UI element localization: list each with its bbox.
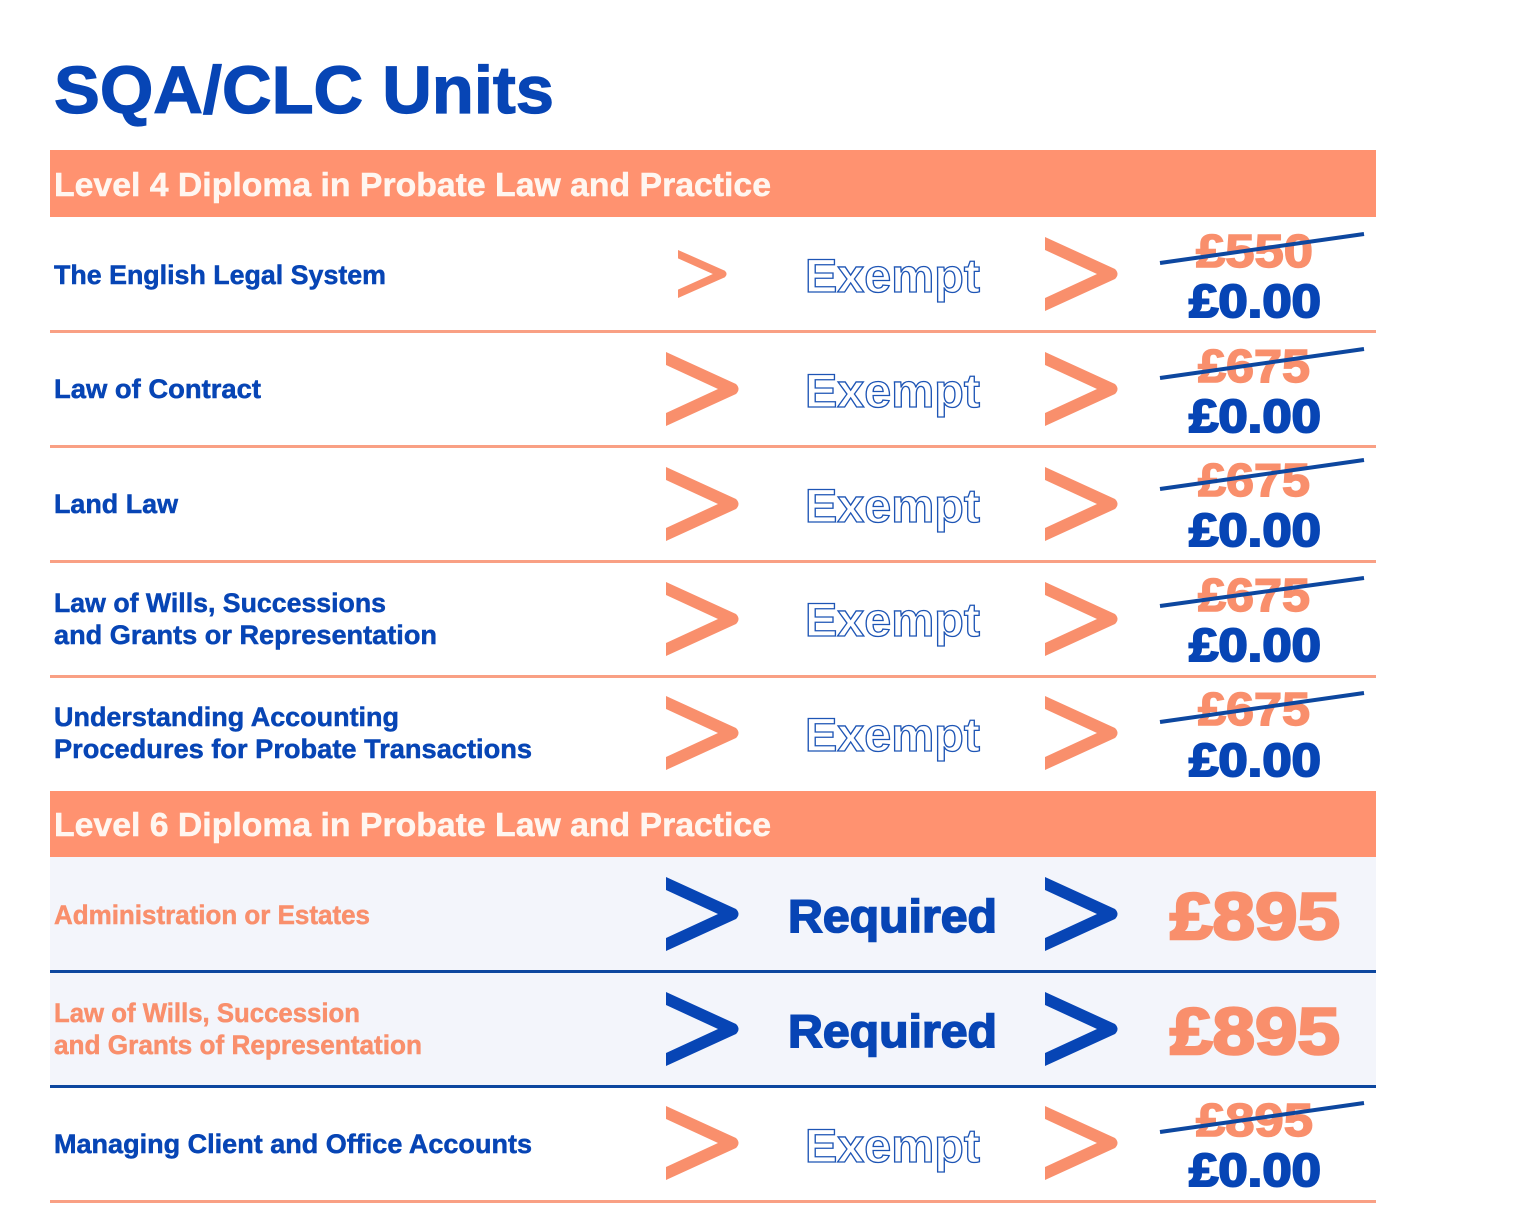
row: Managing Client and Office Accounts: Exempt bbox=[805, 1119, 980, 1172]
row: Understanding Accounting Procedures for Probate Transactions bbox=[54, 683, 1364, 786]
title: SQA/CLC Units bbox=[54, 53, 554, 128]
row: Understanding Accounting Procedures for Probate Transactions: Understanding Accounting bbox=[54, 702, 399, 732]
row: Managing Client and Office Accounts bbox=[50, 1094, 1376, 1203]
section header: Level 4 Diploma bbox=[50, 150, 1376, 217]
row: Law of Wills, Successions and Grants or Representation bbox=[50, 569, 1376, 678]
row: Land Law: Land Law bbox=[54, 489, 179, 519]
row: Law of Wills, Successions and Grants or Representation: Law of Wills, Successions bbox=[54, 588, 386, 618]
row: Law of Wills, Successions and Grants or Representation: £0.00 bbox=[1189, 619, 1321, 671]
row: Land Law: Exempt bbox=[805, 479, 980, 532]
row: The English Legal System: Exempt bbox=[805, 249, 980, 302]
row: Law of Wills, Succession and Grants of Representation: £895 bbox=[1170, 994, 1340, 1068]
row: Law of Contract: Law of Contract bbox=[54, 374, 261, 404]
row: Administration or Estates: Required bbox=[788, 890, 997, 942]
row: Administration or Estates bbox=[50, 857, 1376, 973]
row: The English Legal System: The English Legal System bbox=[54, 260, 386, 290]
row: Understanding Accounting Procedures for Probate Transactions: Procedures for Probate Transactions bbox=[54, 734, 532, 764]
row: Understanding Accounting Procedures for Probate Transactions: Exempt bbox=[805, 708, 980, 761]
row: Land Law bbox=[50, 454, 1376, 563]
row: Law of Wills, Successions and Grants or Representation: Exempt bbox=[805, 593, 980, 646]
row: Law of Contract: Exempt bbox=[805, 364, 980, 417]
row: Administration or Estates: Administration or Estates bbox=[54, 900, 370, 930]
row: Managing Client and Office Accounts: £0.00 bbox=[1189, 1144, 1321, 1196]
row: Law of Wills, Succession and Grants of Representation: Required bbox=[788, 1005, 997, 1057]
section header: Level 6 Diploma bbox=[50, 791, 1376, 857]
row: The English Legal System: £550 bbox=[1196, 225, 1313, 277]
row: Law of Wills, Succession and Grants of Representation: and Grants of Representation bbox=[54, 1030, 422, 1060]
row: Managing Client and Office Accounts: £895 bbox=[1196, 1094, 1313, 1146]
section header: Level 6 Diploma: Level 6 Diploma in Probate Law and Practice bbox=[54, 806, 771, 843]
row: Administration or Estates: £895 bbox=[1170, 879, 1340, 953]
row: Land Law: £0.00 bbox=[1189, 504, 1321, 556]
section header: Level 4 Diploma: Level 4 Diploma in Probate Law and Practice bbox=[54, 166, 771, 203]
row: The English Legal System bbox=[50, 225, 1376, 333]
row: Law of Contract: £675 bbox=[1198, 340, 1310, 392]
row: Law of Wills, Successions and Grants or Representation: £675 bbox=[1198, 569, 1310, 621]
row: The English Legal System: £0.00 bbox=[1189, 275, 1321, 327]
row: Law of Contract: £0.00 bbox=[1189, 390, 1321, 442]
row: Law of Contract bbox=[50, 340, 1376, 448]
row: Law of Wills, Successions and Grants or Representation: and Grants or Representation bbox=[54, 620, 437, 650]
row: Law of Wills, Succession and Grants of Representation bbox=[50, 973, 1376, 1088]
row: Law of Wills, Succession and Grants of Representation: Law of Wills, Succession bbox=[54, 998, 360, 1028]
row: Understanding Accounting Procedures for Probate Transactions: £675 bbox=[1198, 683, 1310, 735]
row: Land Law: £675 bbox=[1198, 454, 1310, 506]
row: Managing Client and Office Accounts: Managing Client and Office Accounts bbox=[54, 1129, 532, 1159]
row: Understanding Accounting Procedures for Probate Transactions: £0.00 bbox=[1189, 734, 1321, 786]
